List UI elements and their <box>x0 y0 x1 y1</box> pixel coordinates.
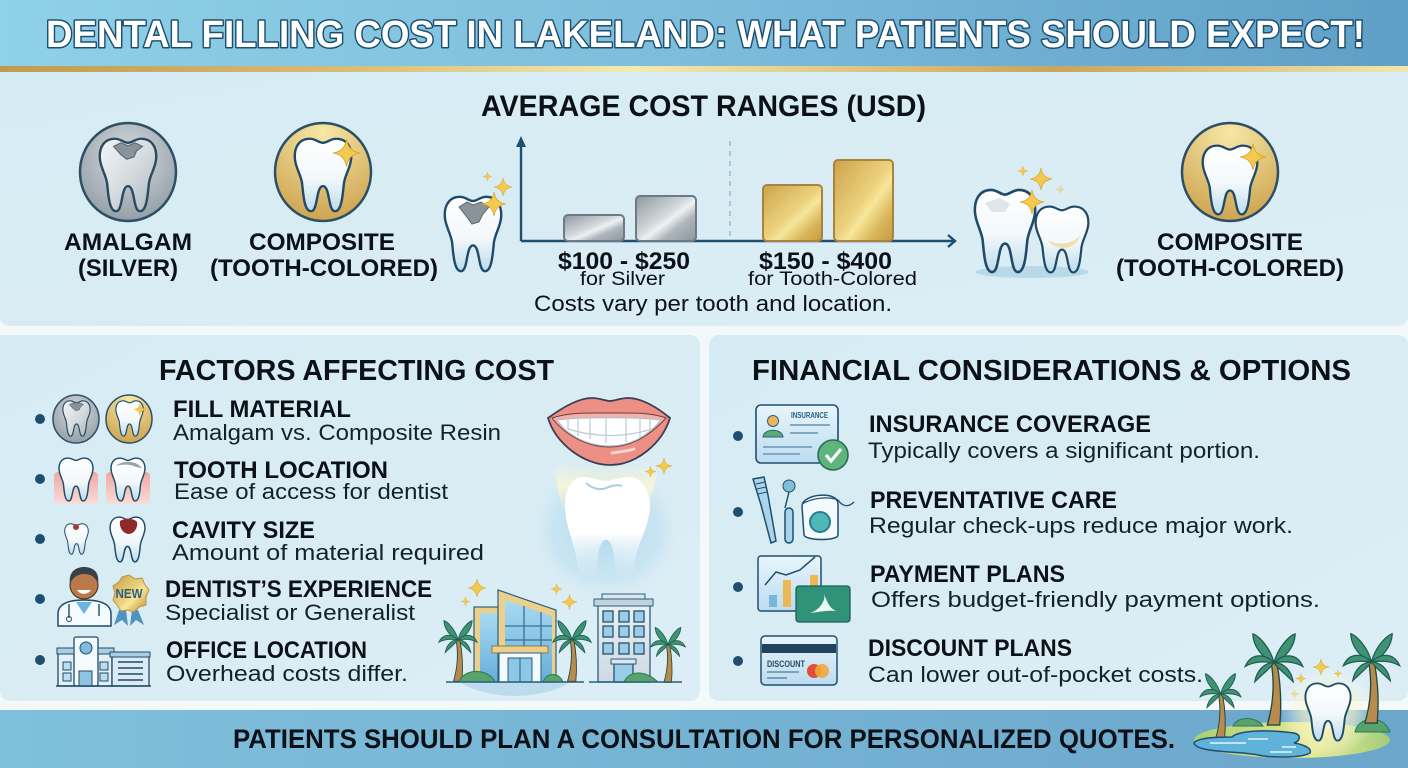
factor: tooth location <box>35 457 448 504</box>
icon: pair of restored teeth <box>975 166 1089 278</box>
title banner <box>0 0 1408 72</box>
bar chart: cost ranges <box>516 136 955 290</box>
factor: tooth location: TOOTH LOCATION <box>174 457 388 484</box>
chart axes <box>521 145 955 247</box>
factor: cavity size: Amount of material required <box>172 540 484 565</box>
icon: smile <box>548 398 670 465</box>
bar: gold high <box>834 160 893 241</box>
factor: office location: Overhead costs differ. <box>166 661 408 686</box>
building: glass office <box>474 590 556 682</box>
icon: amalgam tooth medallion <box>80 123 176 221</box>
icon: composite tooth medallion right <box>1182 123 1278 221</box>
building: tower <box>594 594 653 682</box>
title: DENTAL FILLING COST IN LAKELAND: WHAT PATIENTS SHOULD EXPECT! <box>46 14 1365 56</box>
option: discount plans: DISCOUNT <box>767 659 805 669</box>
heading: average cost ranges: AVERAGE COST RANGES (USD) <box>481 90 926 123</box>
caption: tooth-colored: for Tooth-Colored <box>748 269 917 290</box>
option: preventative care: Regular check-ups reduce major work. <box>869 513 1293 538</box>
bar: gold low <box>763 185 822 241</box>
heading: financial: FINANCIAL CONSIDERATIONS & OPTIONS <box>752 355 1351 387</box>
factor: fill material: Amalgam vs. Composite Resin <box>173 420 501 445</box>
icon: glowing tooth <box>528 458 684 602</box>
panel: average cost ranges <box>0 72 1408 326</box>
factor: office location: OFFICE LOCATION <box>166 637 367 664</box>
panel: factors affecting cost <box>0 335 700 701</box>
factor: dentist's experience: DENTIST’S EXPERIENCE <box>165 576 432 603</box>
factor: office location <box>35 637 408 686</box>
option: insurance coverage: Typically covers a significant portion. <box>868 438 1260 463</box>
option: payment plans <box>733 556 1320 622</box>
icon: island with palms and tooth <box>1194 634 1400 758</box>
caption: silver: for Silver <box>580 269 666 290</box>
footer banner <box>0 710 1408 768</box>
option: discount plans: Can lower out-of-pocket costs. <box>868 662 1203 687</box>
option: discount plans <box>733 635 1203 687</box>
factor: fill material: FILL MATERIAL <box>173 396 351 423</box>
factor: cavity size <box>35 517 484 565</box>
icon: composite tooth medallion <box>275 123 371 221</box>
option: insurance coverage <box>733 405 1260 470</box>
label: amalgam: AMALGAM <box>64 229 192 256</box>
label: composite right: (TOOTH-COLORED) <box>1116 255 1344 282</box>
value: tooth-colored: $150 - $400 <box>759 248 892 275</box>
icon: silver filled tooth <box>445 172 512 271</box>
icon: office buildings with palms <box>439 579 685 696</box>
label: composite right: COMPOSITE <box>1157 229 1303 256</box>
option: insurance coverage: INSURANCE COVERAGE <box>869 411 1151 438</box>
factor: dentist's experience: NEW <box>116 586 143 601</box>
panel: financial considerations and options <box>709 335 1408 701</box>
option: preventative care <box>733 477 1293 543</box>
option: insurance coverage: INSURANCE <box>791 411 829 420</box>
value: silver: $100 - $250 <box>558 248 690 275</box>
bar: silver high <box>636 196 696 241</box>
option: payment plans: PAYMENT PLANS <box>870 561 1065 588</box>
factor: tooth location: Ease of access for dentist <box>174 479 448 504</box>
note: costs vary: Costs vary per tooth and location. <box>534 291 892 316</box>
bar: silver low <box>564 215 624 241</box>
option: payment plans: Offers budget-friendly payment options. <box>871 587 1320 612</box>
option: discount plans: DISCOUNT PLANS <box>868 635 1072 662</box>
option: preventative care: PREVENTATIVE CARE <box>870 487 1117 514</box>
label: composite: COMPOSITE <box>249 229 395 256</box>
factor: fill material <box>35 395 501 445</box>
factor: cavity size: CAVITY SIZE <box>172 517 315 544</box>
factor: dentist's experience: Specialist or Generalist <box>165 600 415 625</box>
factor: dentist's experience <box>35 567 432 626</box>
heading: factors: FACTORS AFFECTING COST <box>159 355 554 387</box>
label: amalgam: (SILVER) <box>78 255 178 282</box>
label: composite: (TOOTH-COLORED) <box>210 255 438 282</box>
footer message: PATIENTS SHOULD PLAN A CONSULTATION FOR PERSONALIZED QUOTES. <box>233 724 1175 754</box>
